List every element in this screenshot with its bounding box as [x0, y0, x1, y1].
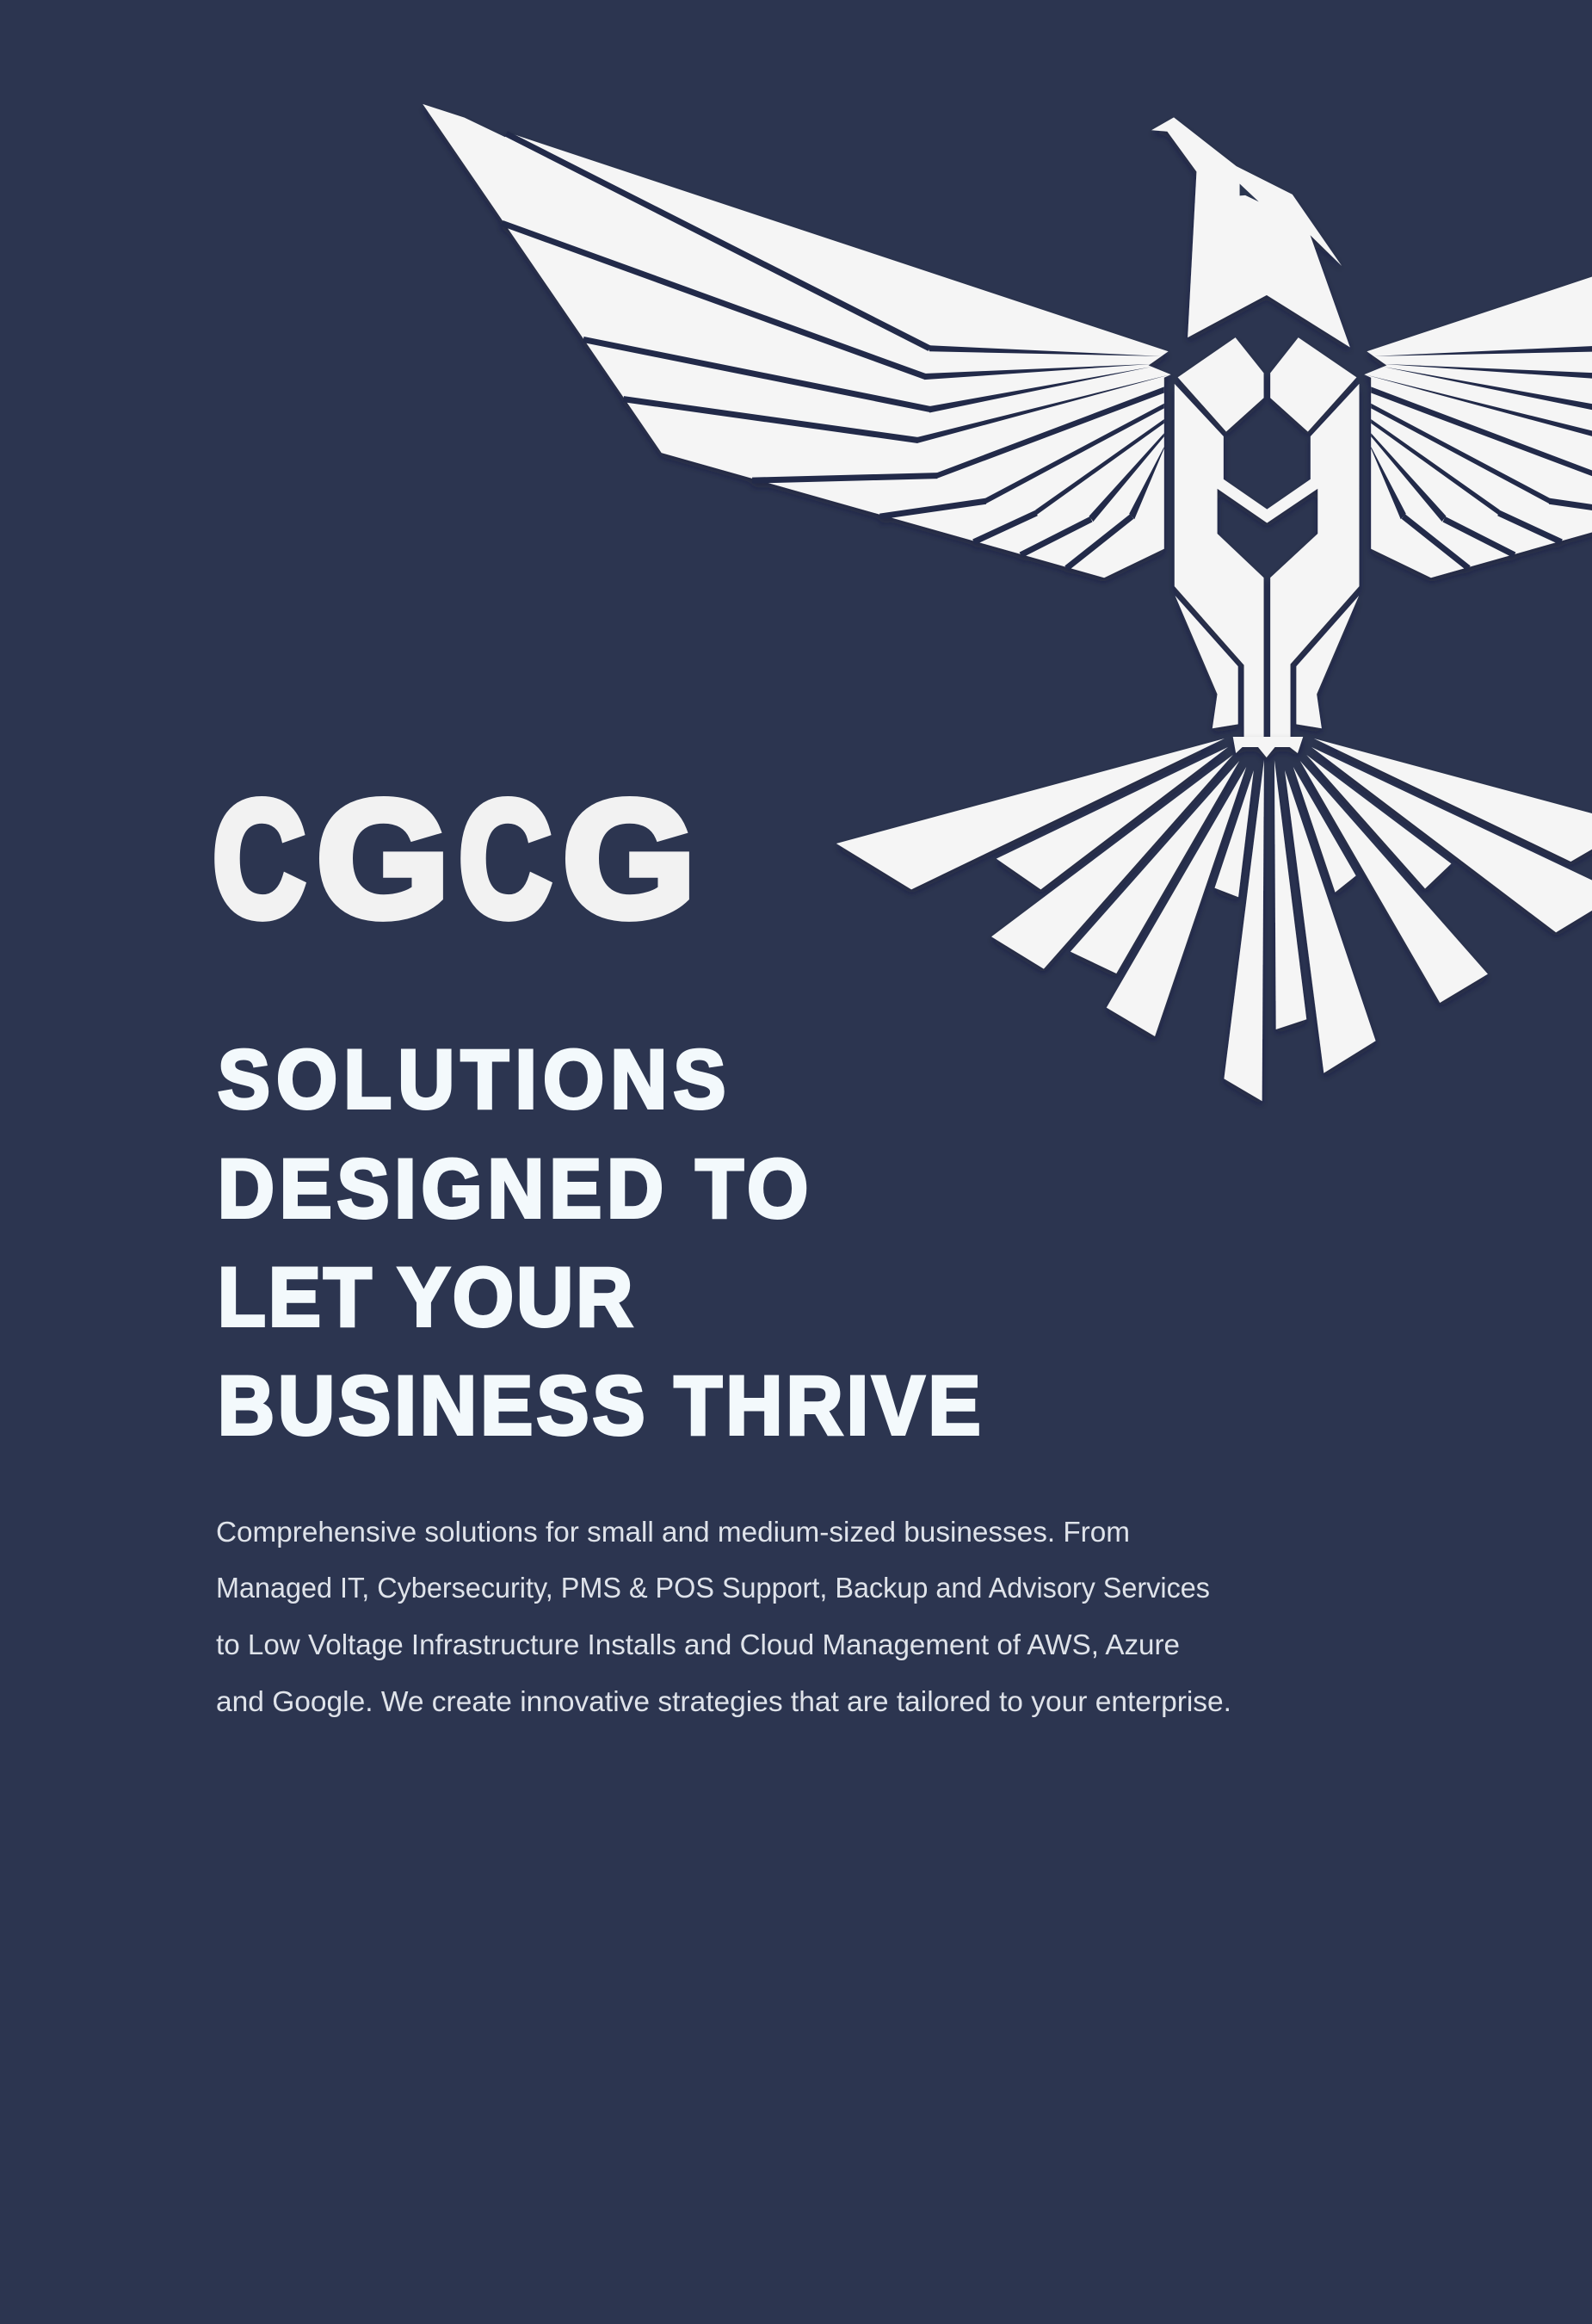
brand name: G — [317, 766, 449, 951]
brand name: C — [459, 766, 552, 951]
description paragraph: Managed IT, Cybersecurity, PMS & POS Support, Backup and Advisory Services — [216, 1572, 1210, 1604]
head and body — [1151, 117, 1360, 737]
headline: LET YOUR — [218, 1250, 632, 1344]
headline: BUSINESS THRIVE — [218, 1358, 980, 1452]
headline: SOLUTIONS — [218, 1032, 725, 1126]
description paragraph — [216, 1516, 1231, 1717]
brand name: G — [563, 766, 695, 951]
left wing — [423, 104, 1171, 578]
description paragraph: Comprehensive solutions for small and medium-sized businesses. From — [216, 1516, 1130, 1548]
headline — [218, 1032, 980, 1452]
headline: DESIGNED TO — [218, 1141, 808, 1235]
tail feathers — [836, 737, 1592, 1101]
brand name: C — [213, 766, 305, 951]
right wing — [1364, 104, 1592, 578]
description paragraph: and Google. We create innovative strategies that are tailored to your enterprise. — [216, 1685, 1231, 1717]
description paragraph: to Low Voltage Infrastructure Installs and Cloud Management of AWS, Azure — [216, 1629, 1180, 1660]
icon: eagle emblem — [423, 104, 1592, 1101]
